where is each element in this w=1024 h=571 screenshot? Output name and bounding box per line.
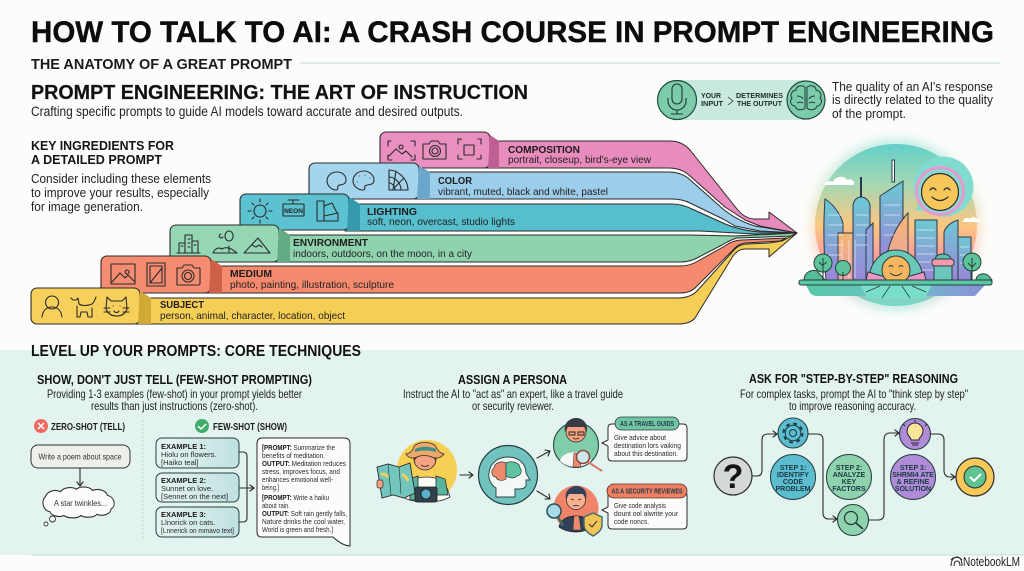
illustration: happy city — [799, 141, 992, 309]
zero-shot prompt box: Write a poem about space — [38, 452, 122, 462]
band: lighting: LIGHTING — [367, 206, 417, 218]
description: persona — [403, 387, 623, 413]
few-shot speech bubble: Nature drinks the cool water, — [262, 517, 345, 526]
few-shot speech bubble: about rain. — [262, 501, 290, 510]
band: composition: COMPOSITION — [508, 144, 580, 156]
step 3: SHRMI4 ATE — [892, 472, 934, 479]
example card 1: [Haiko teal] — [161, 458, 199, 467]
travel guide callout: AS A TRAVEL GUIDS — [620, 421, 674, 428]
security reviewer callout: Give code analysis — [614, 501, 666, 510]
zero-shot response cloud — [43, 487, 114, 526]
key ingredients text: A DETAILED PROMPT — [31, 153, 162, 167]
icon: microphone — [658, 80, 696, 120]
step 1: CODE — [783, 479, 803, 486]
floating platform — [799, 280, 992, 299]
icon: head with brain — [478, 446, 538, 504]
step 1 — [770, 454, 816, 500]
icon: success check — [956, 458, 994, 496]
band: lighting — [240, 194, 797, 234]
icon: gear — [778, 418, 808, 448]
step 2: KEY — [842, 479, 857, 486]
band: lighting: soft, neon, overcast, studio lights — [367, 216, 515, 228]
quality statement: is directly related to the quality — [832, 92, 993, 107]
travel guide callout: destination lors vaiking — [614, 441, 681, 450]
description: few-shot: Providing 1-3 examples (few-shot) in your prompt yields better — [47, 387, 302, 401]
example card 3 — [156, 507, 239, 537]
band: color: COLOR — [438, 175, 472, 187]
buildings — [824, 160, 971, 280]
section heading: anatomy: THE ANATOMY OF A GREAT PROMPT — [31, 56, 292, 73]
zero-shot heading with x icon: ZERO-SHOT (TELL) — [51, 422, 125, 433]
arrow: prompt to response — [77, 468, 83, 486]
quality statement: of the prompt. — [832, 106, 906, 121]
heading: prompt engineering: PROMPT ENGINEERING: THE ART OF INSTRUCTION — [31, 82, 528, 104]
icon: magnifier — [838, 504, 868, 536]
security reviewer callout: AS A SECURITY REVIEWES — [612, 488, 683, 496]
zero-shot response cloud: A star twinkles... — [54, 498, 107, 508]
icon: brain — [787, 81, 825, 119]
example card 2 — [156, 473, 239, 502]
zero-shot heading with x icon — [34, 419, 125, 433]
few-shot speech bubble: World is green and fresh.] — [262, 525, 333, 534]
few-shot heading with check icon: FEW-SHOT (SHOW) — [213, 422, 287, 433]
step 2: FACTORS — [832, 486, 866, 493]
few-shot speech bubble — [257, 438, 350, 546]
arrow: brain to travel guide — [537, 450, 550, 458]
band: composition: portrait, closeup, bird's-eye view — [508, 154, 651, 166]
step 1: PROBLEM — [776, 486, 811, 493]
dome with smiling face — [866, 250, 926, 284]
step 1: IDENTIFY — [777, 472, 809, 479]
quality statement — [832, 79, 993, 121]
step 2 — [826, 454, 872, 500]
few-shot speech bubble: benefits of meditation. — [262, 451, 325, 460]
example card 1: EXAMPLE 1: — [161, 442, 206, 451]
example card 1 — [156, 438, 239, 468]
icon: question mark — [714, 457, 752, 496]
heading: core techniques: LEVEL UP YOUR PROMPTS: CORE TECHNIQUES — [31, 343, 361, 360]
few-shot heading with check icon — [195, 419, 287, 433]
example card 1: Hiolu on flowers. — [161, 450, 216, 459]
description: few-shot — [47, 387, 302, 413]
technique: step-by-step reasoning — [714, 372, 994, 536]
ingredient funnel chart — [31, 132, 797, 324]
example card 3: EXAMPLE 3: — [161, 510, 206, 519]
description: persona: or security reviewer. — [472, 399, 554, 413]
band: environment: indoors, outdoors, on the moon, in a city — [293, 248, 473, 260]
key ingredients text — [31, 139, 211, 214]
few-shot speech bubble: being.] — [262, 483, 279, 492]
step 2: STEP 2: — [836, 465, 862, 472]
example card 3: [Lnnerick on mmavo text] — [161, 526, 234, 535]
few-shot speech bubble: OUTPUT: Meditation reduces — [262, 459, 346, 468]
heading: assign a persona: ASSIGN A PERSONA — [458, 373, 567, 387]
few-shot speech bubble: [PROMPT: Write a haiku — [262, 493, 329, 502]
travel guide callout: about this destination. — [614, 449, 678, 458]
quality statement: The quality of an AI's response — [832, 79, 993, 94]
band: color: vibrant, muted, black and white, pastel — [438, 186, 608, 198]
few-shot speech bubble: enhances emotional well- — [262, 475, 333, 484]
step 1: STEP 1: — [780, 465, 806, 472]
step 3: & REFINE — [897, 479, 930, 486]
step 3 — [890, 454, 936, 500]
band: color — [309, 163, 797, 233]
icon: light bulb — [900, 418, 930, 450]
band: subject: SUBJECT — [160, 299, 205, 311]
few-shot speech bubble: stress, improves focus, and — [262, 467, 340, 476]
security reviewer callout: code noncs. — [614, 517, 649, 526]
badge text: your input: INPUT — [701, 99, 723, 108]
description: few-shot: results than just instructions (zero-shot). — [91, 399, 258, 413]
security reviewer callout: dount ool alwrite your — [614, 509, 678, 518]
input determines output badge — [658, 80, 825, 120]
building stripes — [828, 205, 969, 278]
heading: show don't tell: SHOW, DON'T JUST TELL (FEW-SHOT PROMPTING) — [37, 373, 312, 387]
travel guide callout — [602, 417, 687, 461]
band: medium — [101, 238, 787, 293]
step 2: ANALYZE — [833, 472, 866, 479]
zero-shot prompt box — [31, 445, 130, 468]
badge text: your input: THE OUTPUT — [737, 99, 782, 108]
band: lighting: NEON — [284, 208, 303, 215]
key ingredients text: KEY INGREDIENTS FOR — [31, 139, 174, 153]
example card 2: [Sennet on the next] — [161, 492, 228, 501]
few-shot speech bubble: [PROMPT: Summarize the — [262, 443, 335, 452]
intro text: Crafting specific prompts to guide AI models toward accurate and desired outputs. — [31, 104, 463, 119]
security reviewer callout — [602, 484, 687, 529]
trees and bushes — [804, 253, 992, 280]
band: medium: MEDIUM — [230, 268, 272, 280]
badge text: your input: DETERMINES — [736, 91, 783, 100]
band: subject: person, animal, character, location, object — [160, 310, 345, 322]
band: environment — [170, 225, 797, 262]
icon: traveler with map — [377, 440, 457, 502]
few-shot speech bubble: OUTPUT: Soft rain gently falls, — [262, 509, 347, 518]
badge text: your input: YOUR — [701, 91, 722, 100]
band: environment: ENVIRONMENT — [293, 237, 369, 249]
description: persona: Instruct the AI to "act as" an expert, like a travel guide — [403, 387, 623, 401]
example card 3: Llnorick on cats. — [161, 518, 215, 527]
step 3: SOLUTION — [895, 486, 931, 493]
heading: step by step: ASK FOR "STEP-BY-STEP" REASONING — [749, 372, 958, 386]
badge text: your input — [701, 91, 783, 108]
band: medium: photo, painting, illustration, sculpture — [230, 279, 394, 291]
icon: security reviewer persona — [547, 486, 602, 536]
travel guide callout: Give advice about — [614, 433, 667, 442]
arrow: brain to security reviewer — [537, 491, 550, 499]
arrow: traveler to brain — [460, 472, 473, 478]
band: composition — [380, 132, 797, 233]
example card 2: Sunnet on love. — [161, 484, 213, 493]
bracket arrow: examples to prompt — [239, 452, 254, 522]
description: step by step — [740, 387, 968, 413]
icon: travel guide persona — [554, 418, 602, 471]
key ingredients text: Consider including these elements — [31, 172, 211, 186]
technique: few-shot prompting — [31, 373, 350, 546]
technique: assign a persona — [377, 373, 687, 536]
step 3: STEP 3: — [900, 465, 926, 472]
key ingredients text: to improve your results, especially — [31, 186, 210, 200]
smiley speech bubble — [913, 157, 973, 217]
description: step by step: to improve reasoning accuracy. — [789, 399, 916, 413]
title: HOW TO TALK TO AI: A CRASH COURSE IN PROMPT ENGINEERING — [31, 16, 994, 49]
flow connectors — [752, 430, 955, 522]
icon: question mark: ? — [723, 458, 743, 496]
cloud — [824, 177, 854, 185]
dashed divider — [142, 420, 144, 538]
key ingredients text: for image generation. — [31, 200, 143, 214]
band: subject — [31, 233, 797, 324]
example card 2: EXAMPLE 2: — [161, 476, 206, 485]
